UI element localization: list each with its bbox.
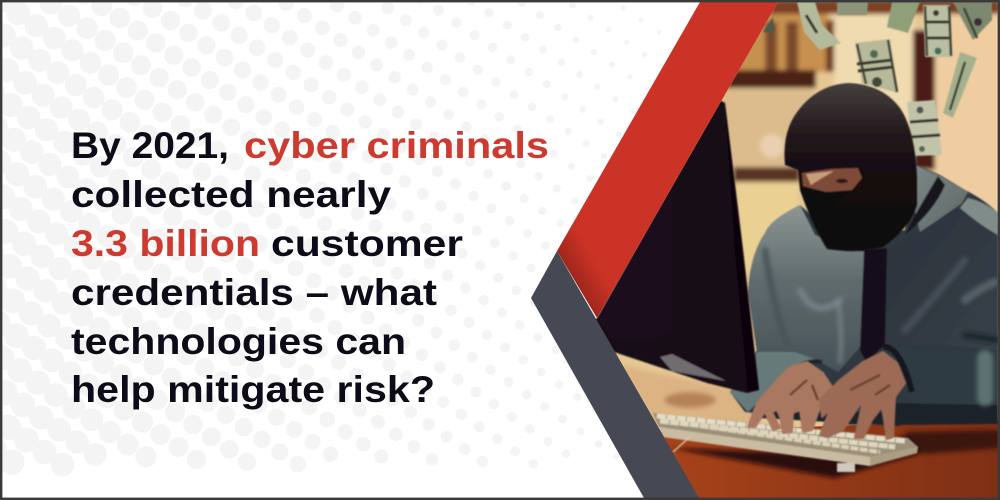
headline: credentials – what (71, 272, 437, 313)
headline (71, 125, 549, 410)
headline: collected nearly (71, 174, 391, 215)
desk shadows (670, 430, 1000, 478)
wooden desk (650, 420, 998, 498)
hoodie right chest (885, 254, 998, 349)
blurred foreground below monitor (624, 366, 752, 424)
blurred room background (596, 2, 998, 432)
balaclava (784, 83, 917, 251)
hood folds (912, 165, 968, 232)
headline: cyber criminals (244, 125, 549, 166)
headline: customer (271, 223, 463, 264)
right sleeve (885, 345, 998, 422)
keyboard (653, 413, 918, 472)
headline: help mitigate risk? (71, 369, 435, 410)
hands (748, 352, 905, 439)
red diagonal band (557, 2, 778, 318)
grey chevron (531, 251, 699, 498)
left cuff (730, 352, 817, 412)
headline: 3.3 billion (71, 223, 260, 264)
falling banknotes (763, 2, 992, 156)
hoodie body (730, 163, 998, 426)
headline: technologies can (71, 321, 406, 362)
eye opening (802, 168, 862, 192)
fabric highlights (765, 250, 998, 398)
headline: By 2021, (71, 125, 229, 166)
photo: masked hacker at a computer (590, 0, 1000, 498)
hoodie left chest and sleeve (748, 205, 866, 372)
front placket (860, 248, 887, 362)
computer monitor (590, 100, 759, 393)
halftone dot pattern (2, 2, 664, 476)
